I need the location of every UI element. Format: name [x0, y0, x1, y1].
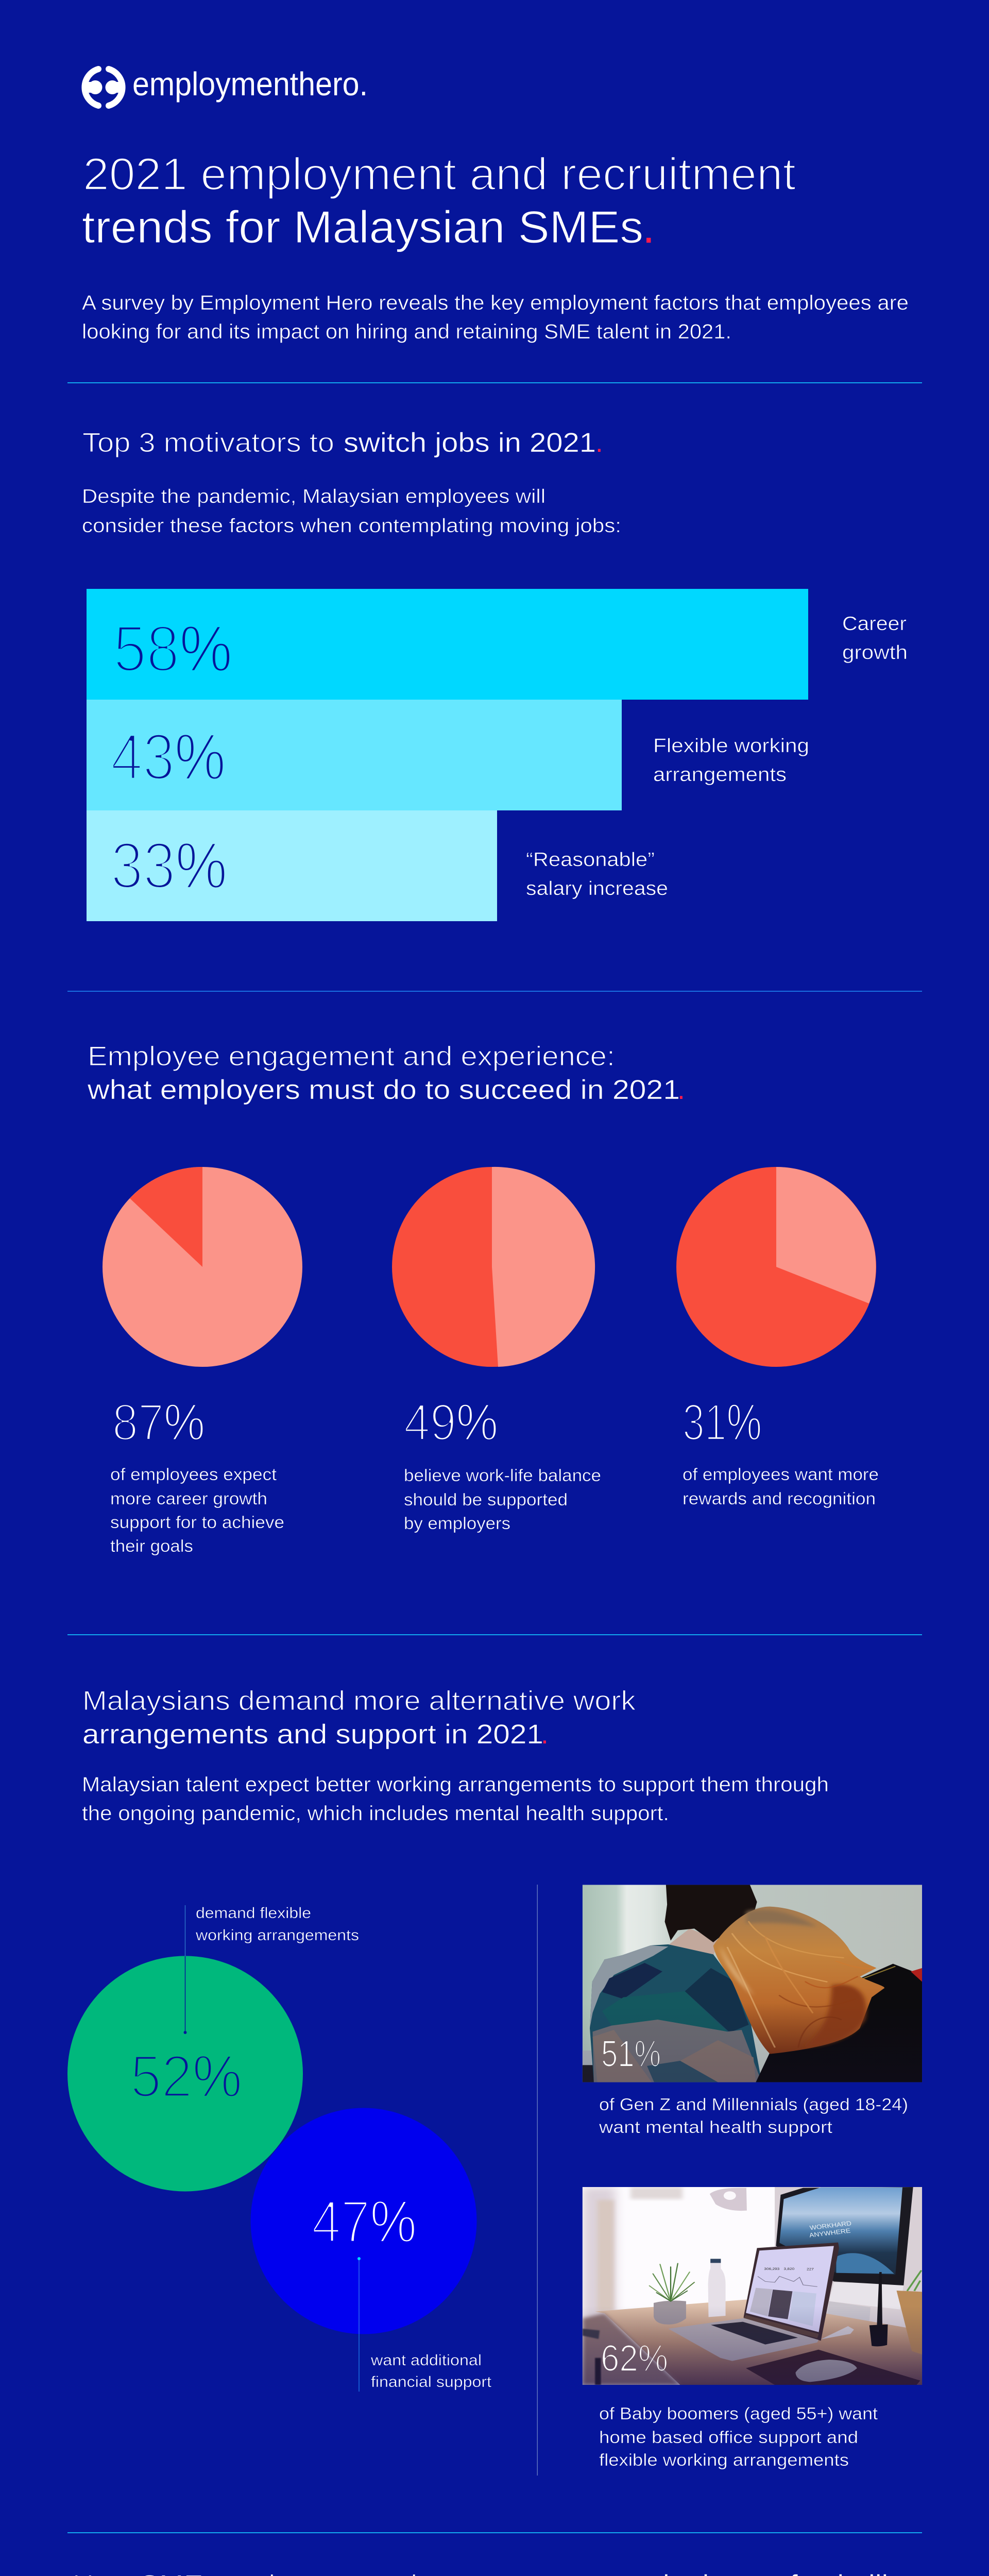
heading	[82, 1686, 636, 1750]
heading: .	[595, 428, 603, 458]
stat 51%: 51%	[601, 2033, 661, 2075]
bubble: 52%: demand flexible	[196, 1905, 311, 1922]
panel: alternative work arrangements	[67, 1686, 922, 2476]
title: trends for Malaysian SMEs	[82, 201, 643, 252]
bubble: 47%: 47%	[312, 2188, 417, 2255]
caption	[599, 2095, 908, 2137]
bar: career growth 58%	[87, 589, 908, 700]
bar: reasonable salary 33%: 33%	[111, 829, 227, 902]
description: rewards and recognition	[683, 1489, 876, 1508]
pie stat: 31%: 31%	[683, 1394, 762, 1451]
intro text	[82, 486, 621, 537]
photo: laptop and monitor on desk: WORKHARD	[809, 2220, 852, 2232]
bubble: 47%	[250, 2108, 492, 2392]
intro text: Malaysian talent expect better working arrangements to support them through	[82, 1773, 829, 1796]
caption: of Baby boomers (aged 55+) want	[599, 2404, 878, 2423]
description: believe work-life balance	[404, 1466, 601, 1485]
bar: career growth 58%: growth	[842, 642, 908, 664]
description	[404, 1466, 601, 1533]
bubble: 47%: financial support	[371, 2374, 492, 2391]
pie chart 31%	[676, 1167, 876, 1367]
title: 2021 employment and recruitment	[83, 148, 796, 199]
photo stat: 62%	[583, 2187, 922, 2469]
description	[110, 1465, 284, 1555]
stat 62%: 62%	[601, 2338, 668, 2379]
bar: career growth 58%: Career	[842, 613, 907, 635]
heading: Top 3 motivators to	[82, 428, 334, 458]
wordmark: employmenthero.	[132, 65, 368, 103]
description: more career growth	[110, 1489, 267, 1508]
heading: .	[677, 1075, 685, 1105]
photo: laptop and monitor on desk: 227	[807, 2267, 814, 2271]
pie stat: 87%	[103, 1167, 302, 1555]
bubble: 52%: 52%	[130, 2043, 242, 2110]
logo	[83, 65, 368, 106]
bubble: 52%	[67, 1905, 359, 2192]
intro paragraph: A survey by Employment Hero reveals the key employment factors that employees are	[82, 292, 909, 314]
bubble: 47%: want additional	[370, 2352, 482, 2369]
bar: flexible working 43%: arrangements	[653, 764, 787, 786]
pie chart 49%	[392, 1167, 595, 1367]
caption: flexible working arrangements	[599, 2450, 849, 2469]
panel: how to boost engagement	[73, 2570, 916, 2576]
bar: career growth 58%: 58%	[113, 612, 232, 685]
intro text	[82, 1773, 829, 1825]
photo: laptop and monitor on desk	[583, 2187, 922, 2385]
bar: flexible working 43%: 43%	[111, 720, 226, 793]
bar: reasonable salary 33%	[87, 810, 668, 921]
pie stat: 31%	[676, 1167, 879, 1508]
heading: .	[541, 1719, 549, 1750]
intro paragraph: looking for and its impact on hiring and retaining SME talent in 2021.	[82, 320, 731, 343]
heading	[73, 2570, 916, 2576]
intro text: Despite the pandemic, Malaysian employees will	[82, 486, 545, 507]
bar: reasonable salary 33%: “Reasonable”	[526, 849, 655, 871]
title: .	[642, 201, 655, 252]
description: their goals	[110, 1536, 193, 1555]
bar chart	[87, 589, 908, 921]
heading: what employers must do to succeed in 2021	[87, 1075, 680, 1105]
description	[683, 1465, 879, 1508]
photo stat: 51%	[583, 1885, 922, 2137]
heading: switch jobs in 2021	[344, 428, 596, 458]
bar: flexible working 43%: Flexible working	[653, 735, 809, 757]
photo: laptop and monitor on desk: 3,820	[783, 2267, 794, 2271]
photo: laptop and monitor on desk: 306,293	[764, 2267, 779, 2271]
pie stat: 87%: 87%	[112, 1394, 205, 1451]
caption: of Gen Z and Millennials (aged 18-24)	[599, 2095, 908, 2114]
caption: home based office support and	[599, 2428, 858, 2447]
photo: laptop and monitor on desk: ANYWHERE	[809, 2228, 851, 2239]
description: of employees want more	[683, 1465, 879, 1484]
panel: top 3 motivators	[82, 428, 908, 921]
description: by employers	[404, 1514, 510, 1533]
description: should be supported	[404, 1490, 568, 1509]
heading	[82, 428, 603, 458]
caption	[599, 2404, 878, 2469]
panel: employee engagement	[87, 1041, 879, 1555]
photo: two people leaning together	[583, 1885, 922, 2082]
pie stat: 49%: 49%	[404, 1394, 498, 1451]
pie stat: 49%	[392, 1167, 601, 1533]
intro text: the ongoing pandemic, which includes mental health support.	[82, 1802, 669, 1825]
title	[82, 148, 796, 252]
bubble: 52%: working arrangements	[195, 1927, 359, 1944]
intro text: consider these factors when contemplating moving jobs:	[82, 515, 621, 537]
icon: employment hero mark	[83, 69, 124, 106]
heading: Malaysians demand more alternative work	[82, 1686, 636, 1716]
heading	[87, 1041, 685, 1105]
description: of employees expect	[110, 1465, 277, 1484]
description: support for to achieve	[110, 1513, 284, 1532]
intro paragraph	[82, 292, 909, 343]
caption: want mental health support	[599, 2117, 832, 2137]
panel: header	[82, 65, 909, 343]
heading: arrangements and support in 2021	[82, 1719, 543, 1750]
bar: flexible working 43%	[87, 700, 809, 810]
heading: Employee engagement and experience:	[88, 1041, 615, 1072]
pie chart 87%	[103, 1167, 302, 1367]
bar: reasonable salary 33%: salary increase	[526, 878, 668, 900]
